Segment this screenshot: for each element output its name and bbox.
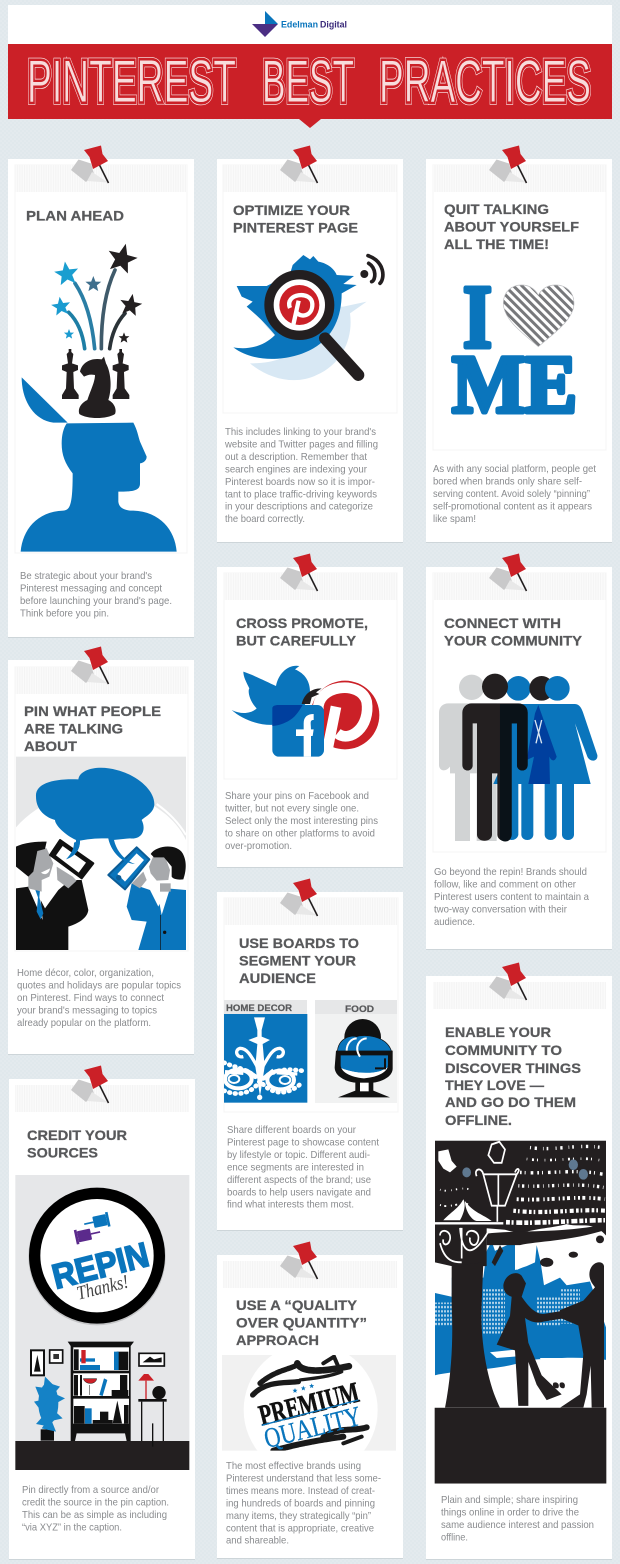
body text: tant to place traffic-driving keywords <box>225 488 377 500</box>
title text: BEST <box>262 48 354 115</box>
side table with lamp and vase <box>138 1374 167 1447</box>
body text <box>227 1124 379 1211</box>
body text: offline. <box>441 1532 468 1544</box>
body text: credit the source in the pin caption. <box>22 1496 169 1508</box>
illustration: premium quality seal: QUALITY <box>261 1401 364 1455</box>
illustration: I love me: ME <box>452 338 577 430</box>
body text: website and Twitter pages and filling <box>224 438 378 450</box>
body text: two-way conversation with their <box>434 903 567 915</box>
panel: pin what people are talking about <box>8 646 194 1055</box>
body text: by lifestyle or topic. Different audi- <box>227 1149 370 1161</box>
illustration: couple under tree and lamp in front of parliament <box>435 1141 606 1484</box>
heading: QUIT TALKING <box>444 201 549 217</box>
heading: ABOUT <box>24 738 77 754</box>
illustration: twitter, facebook and pinterest logos <box>232 666 379 757</box>
body text: over-promotion. <box>225 840 292 852</box>
board: home decor chandelier: HOME DECOR <box>226 1003 293 1013</box>
body text <box>17 967 181 1029</box>
body text: This can be as simple as including <box>22 1509 167 1521</box>
pin icon <box>489 554 526 591</box>
illustration: group of people <box>439 674 597 841</box>
body text: Go beyond the repin! Brands should <box>434 866 587 878</box>
body text: Select only the most interesting pins <box>225 815 378 827</box>
body text: different aspects of the brand; use <box>227 1174 371 1186</box>
heading: USE A “QUALITY <box>236 1297 358 1313</box>
body text: on Pinterest. Find ways to connect <box>17 992 164 1004</box>
picture frames <box>31 1350 164 1375</box>
heading: ALL THE TIME! <box>444 236 549 252</box>
heading: AUDIENCE <box>239 970 316 986</box>
panel: credit your sources <box>9 1066 195 1560</box>
body text: in your descriptions and categorize <box>225 501 373 513</box>
heading <box>236 1297 367 1348</box>
heading: SEGMENT YOUR <box>239 952 356 968</box>
heading: ARE TALKING <box>24 720 123 736</box>
board: food ice cream: FOOD <box>345 1004 375 1014</box>
heading <box>444 201 579 252</box>
body text: As with any social platform, people get <box>433 463 596 475</box>
body text: the board correctly. <box>225 513 305 525</box>
heading <box>27 1127 127 1160</box>
body text: content that is appropriate, creative <box>226 1522 374 1534</box>
heading <box>239 935 359 986</box>
body text: to share on other platforms to avoid <box>225 827 375 839</box>
body text: find what interests them most. <box>227 1199 354 1211</box>
body text: things online in order to drive the <box>441 1506 579 1518</box>
illustration: premium quality seal: PREMIUM <box>256 1377 362 1432</box>
body text: Pinterest boards now so it is impor- <box>225 476 375 488</box>
body text <box>441 1494 594 1544</box>
logo: Edelman Digital: Edelman <box>281 20 318 30</box>
heading: DISCOVER THINGS <box>445 1060 581 1076</box>
heading <box>445 1024 581 1128</box>
heading <box>236 615 368 648</box>
heading: OVER QUANTITY” <box>236 1314 367 1330</box>
heading: AND GO DO THEM <box>445 1094 576 1110</box>
girl <box>497 1273 567 1406</box>
lamp post <box>435 1142 519 1262</box>
board: home decor chandelier <box>224 1000 307 1103</box>
heading: PLAN AHEAD <box>26 208 124 224</box>
panel: optimize your pinterest page <box>217 146 403 543</box>
body text <box>22 1484 169 1533</box>
badge: repin thanks: Thanks! <box>75 1271 131 1305</box>
body text: follow, like and comment on other <box>434 878 576 890</box>
heading: COMMUNITY TO <box>445 1042 562 1058</box>
panel: cross promote <box>217 554 403 868</box>
illustration: two people on phones with speech bubble <box>16 757 186 950</box>
heading <box>24 703 161 754</box>
body text: Pinterest page to showcase content <box>227 1136 379 1148</box>
pin icon <box>71 146 108 183</box>
body text <box>226 1460 381 1547</box>
panel: quality over quantity <box>217 1242 403 1559</box>
body text: Pinterest messaging and concept <box>20 582 162 594</box>
heading: CROSS PROMOTE, <box>236 615 368 631</box>
heading: PIN WHAT PEOPLE <box>24 703 161 719</box>
heading: APPROACH <box>236 1332 319 1348</box>
pin icon <box>280 554 318 591</box>
title text: PINTEREST <box>27 48 236 115</box>
body text: already popular on the platform. <box>17 1017 151 1029</box>
body text: “via XYZ” in the caption. <box>22 1521 122 1533</box>
body text: serving content. Avoid solely “pinning” <box>433 488 590 500</box>
body text: Home décor, color, organization, <box>17 967 154 979</box>
heading: BUT CAREFULLY <box>236 632 357 648</box>
body text: and shareable. <box>226 1535 289 1547</box>
body text: Pinterest users content to maintain a <box>434 891 589 903</box>
body text <box>224 426 378 525</box>
badge: repin thanks <box>28 1188 166 1325</box>
title text: BEST <box>262 48 354 115</box>
heading: THEY LOVE — <box>445 1077 544 1093</box>
body text: out a description. Remember that <box>225 451 367 463</box>
body text: ence segments are interested in <box>227 1161 364 1173</box>
body text: bored when brands only share self- <box>433 476 582 488</box>
white speckles in canopy <box>438 1146 605 1223</box>
body text: your brand's messaging to topics <box>17 1004 157 1016</box>
body text: audience. <box>434 916 475 928</box>
woman <box>108 838 186 950</box>
heading: YOUR COMMUNITY <box>444 632 583 648</box>
header: Edelman Digital logo strip <box>8 5 612 44</box>
panel: plan ahead <box>8 146 194 638</box>
heading <box>444 615 583 648</box>
illustration: head with chess pieces and stars <box>21 240 177 552</box>
heading: OFFLINE. <box>445 1112 512 1128</box>
board: food ice cream <box>315 1000 397 1103</box>
pin icon <box>280 878 318 916</box>
pin icon <box>71 646 108 684</box>
heading: USE BOARDS TO <box>239 935 359 951</box>
title text: PINTEREST <box>27 48 236 115</box>
panel: enable your community <box>426 962 612 1560</box>
pin icon <box>280 146 318 183</box>
plant <box>34 1377 65 1441</box>
body text: The most effective brands using <box>226 1460 361 1472</box>
body text: Think before you pin. <box>20 608 109 620</box>
illustration: repin badge and bookshelf room <box>15 1175 189 1470</box>
title text: PINTEREST <box>27 48 236 115</box>
body text: Share different boards on your <box>227 1124 356 1136</box>
body text: times means more. Instead of creat- <box>226 1485 375 1497</box>
body text <box>433 463 596 525</box>
logo: Edelman Digital: Digital <box>320 20 347 30</box>
title text <box>27 48 591 115</box>
body text <box>225 790 378 852</box>
body text: Pinterest understand that less some- <box>226 1472 381 1484</box>
title text: BEST <box>262 48 354 115</box>
heading: ABOUT YOURSELF <box>444 218 579 234</box>
body text: quotes and holidays are popular topics <box>17 980 181 992</box>
pin icon <box>489 962 526 1000</box>
illustration: premium quality seal <box>222 1355 396 1451</box>
body text: same audience interest and passion <box>441 1519 594 1531</box>
title banner <box>8 44 612 128</box>
body text: before launching your brand's page. <box>20 595 172 607</box>
heading: OPTIMIZE YOUR <box>233 202 350 218</box>
body text: Be strategic about your brand's <box>20 570 152 582</box>
illustration: I love me <box>452 268 577 430</box>
logo: Edelman Digital <box>252 11 347 37</box>
tree trunk <box>445 1262 500 1408</box>
parliament skyline <box>435 1241 606 1375</box>
leaves on branch <box>492 1236 604 1267</box>
body text: ing hundreds of boards and pinning <box>226 1497 375 1509</box>
heading <box>233 202 358 235</box>
body text: many items, they strategically “pin” <box>226 1510 371 1522</box>
body text: This includes linking to your brand's <box>225 426 376 438</box>
illustration: twitter bird under magnifier <box>233 255 383 380</box>
heading: SOURCES <box>27 1144 98 1160</box>
body text: Share your pins on Facebook and <box>225 790 369 802</box>
body text: search engines are indexing your <box>225 463 367 475</box>
pin icon <box>489 146 526 183</box>
man <box>560 1262 604 1408</box>
body text: Pin directly from a source and/or <box>22 1484 159 1496</box>
pin icon <box>71 1066 108 1103</box>
panel: quit talking about yourself <box>426 146 612 543</box>
body text: self-promotional content as it appears <box>433 500 592 512</box>
heading: CONNECT WITH <box>444 615 561 631</box>
heading: ENABLE YOUR <box>445 1024 551 1040</box>
body text: like spam! <box>433 513 476 525</box>
badge: repin thanks: REPIN <box>49 1236 153 1297</box>
panel: connect with your community <box>426 554 612 950</box>
heading: PINTEREST PAGE <box>233 219 358 235</box>
body text: boards to help users navigate and <box>227 1186 371 1198</box>
pin icon <box>280 1242 318 1279</box>
body text <box>434 866 589 928</box>
body text: Plain and simple; share inspiring <box>441 1494 578 1506</box>
tree canopy <box>435 1141 606 1236</box>
icon: striped heart <box>503 285 574 347</box>
heading: CREDIT YOUR <box>27 1127 127 1143</box>
man <box>16 840 93 950</box>
body text: twitter, but not every single one. <box>225 802 359 814</box>
bookshelf <box>68 1342 134 1441</box>
panel: use boards to segment your audience <box>217 878 403 1231</box>
body text <box>20 570 172 620</box>
illustration: I love me: I <box>463 268 492 367</box>
